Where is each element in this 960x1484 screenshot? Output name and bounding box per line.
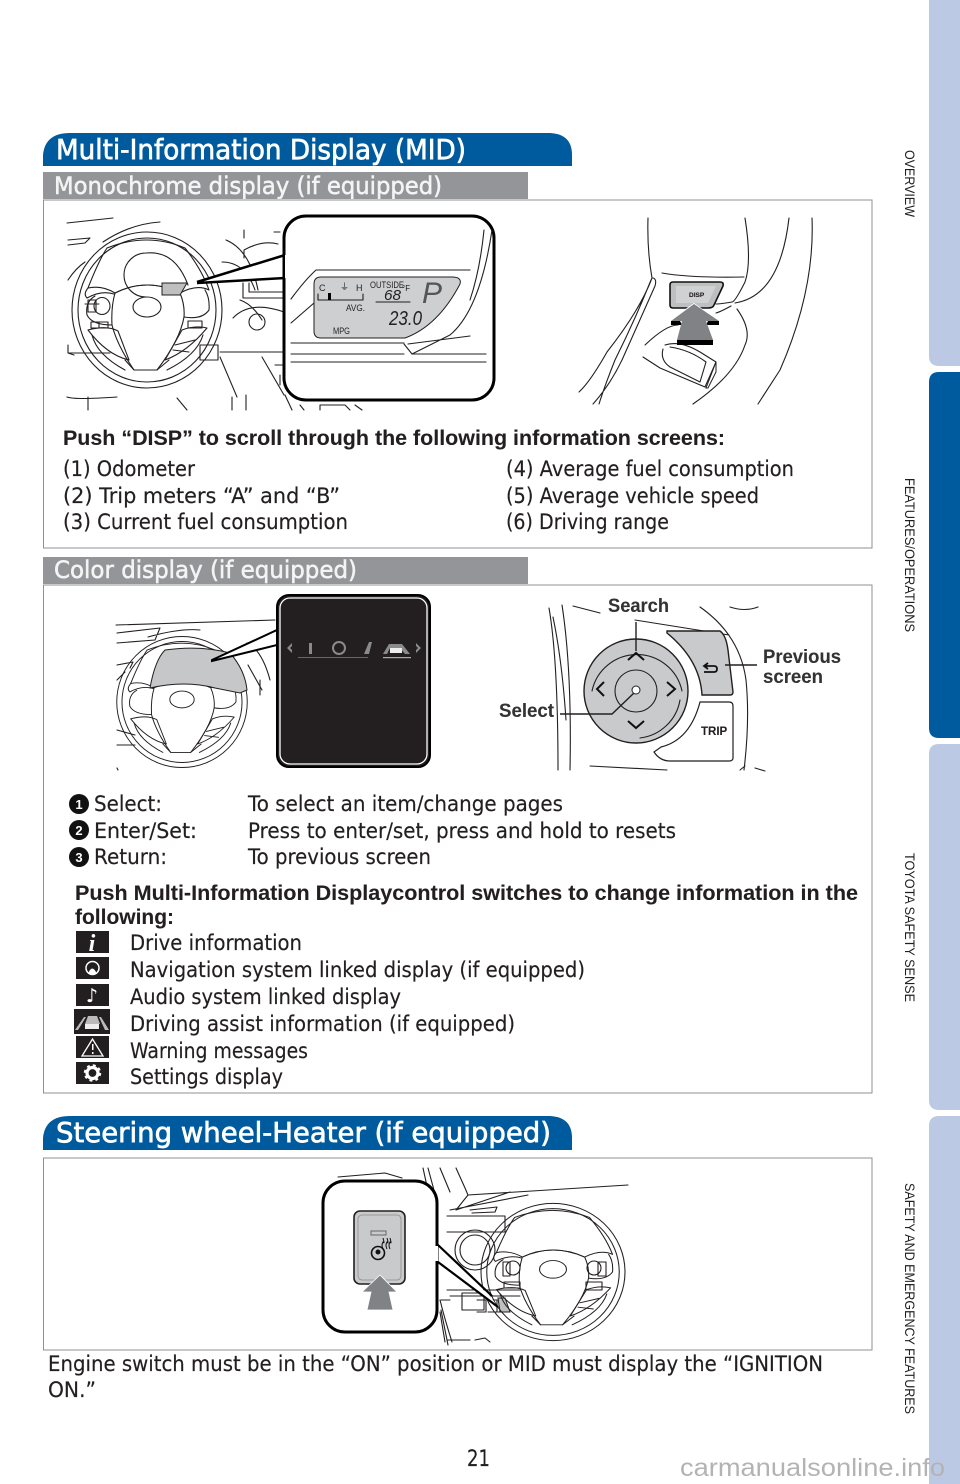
- text: screens list left: (2) Trip meters “A” and “B”: [63, 484, 340, 508]
- callout: monochrome instrument display: 68: [384, 287, 402, 304]
- information list: Navigation system linked display (if equipped): [130, 958, 585, 982]
- label: Search: Search: [608, 596, 669, 617]
- controls list: Return:: [94, 845, 167, 869]
- information list: [130, 931, 585, 1089]
- sidebar labels: OVERVIEW: [902, 150, 917, 217]
- icon: number 1: [69, 794, 89, 814]
- callout: monochrome instrument display: MPG: [333, 326, 350, 336]
- text: screens list right: (5) Average vehicle speed: [506, 484, 759, 508]
- sidebar tab: features and operations (active): [929, 372, 960, 738]
- text: engine switch note: ON.”: [48, 1378, 96, 1402]
- callout: monochrome instrument display: C: [319, 283, 326, 293]
- sidebar tab: overview: [929, 0, 960, 366]
- icon: settings: [76, 1062, 109, 1084]
- information list: Audio system linked display: [130, 985, 401, 1009]
- icon: heater switch: [354, 1211, 405, 1284]
- controls list: [69, 792, 676, 869]
- icon: steering wheel: [72, 232, 222, 388]
- icon: steering wheel: [481, 1203, 625, 1341]
- controls list: Press to enter/set, press and hold to resets: [248, 819, 676, 843]
- sidebar labels: TOYOTA SAFETY SENSE: [902, 853, 917, 1002]
- illustration: dashboard with highlighted cluster: [116, 620, 275, 770]
- text: switches instructions: [75, 882, 858, 929]
- illustration: dashboard with steering wheel: [338, 1168, 628, 1345]
- icon: number 2: 2: [75, 823, 83, 838]
- illustration: dashboard with steering wheel: [67, 218, 362, 410]
- text: screens list left: [63, 457, 348, 534]
- callout: monochrome instrument display: P: [422, 277, 442, 310]
- watermark: carmanualsonline.info: [680, 1454, 945, 1482]
- illustration: steering switch cluster: [549, 605, 765, 771]
- sidebar tab: safety and emergency features: [929, 1116, 960, 1484]
- callout: monochrome instrument display: OUTSIDE: [370, 280, 404, 290]
- panel: monochrome display: [44, 200, 872, 548]
- information list: Drive information: [130, 931, 302, 955]
- text: engine switch note: [48, 1352, 823, 1402]
- text: screens list right: (4) Average fuel consumption: [506, 457, 794, 481]
- callout: monochrome instrument display: H: [356, 283, 362, 293]
- panel: steering wheel heater: [44, 1158, 872, 1350]
- information list: Warning messages: [130, 1039, 308, 1063]
- text: screens list right: [506, 457, 794, 534]
- callout: monochrome instrument display: [197, 216, 494, 400]
- icon: directional controller: [584, 639, 688, 743]
- icon: number 3: 3: [75, 850, 83, 865]
- panel: color display: [44, 585, 872, 1093]
- controls list: Enter/Set:: [94, 819, 197, 843]
- icon: steering wheel: [117, 636, 247, 768]
- subheading: Monochrome display: Monochrome display (if equipped): [54, 172, 442, 200]
- icon: drive information: [76, 931, 109, 957]
- label: Select: Select: [499, 701, 555, 722]
- callout: monochrome instrument display: AVG.: [346, 303, 365, 313]
- text: screens list right: (6) Driving range: [506, 510, 669, 534]
- label: Previous screen: [763, 647, 841, 688]
- sidebar labels: [902, 150, 917, 1414]
- callout: monochrome instrument display: 23.0: [388, 308, 422, 330]
- information list: Settings display: [130, 1065, 283, 1089]
- icon: TRIP button: TRIP: [701, 726, 728, 738]
- icon: warning: [76, 1036, 109, 1058]
- icon: audio: ♪: [86, 985, 98, 1007]
- sidebar labels: FEATURES/OPERATIONS: [902, 478, 917, 632]
- heading: Multi-Information Display: Multi-Information Display (MID): [56, 133, 466, 166]
- icon: navigation: [76, 957, 109, 979]
- controls list: Select:: [94, 792, 162, 816]
- icon: driving assist: [74, 1009, 110, 1034]
- label: Previous screen: screen: [763, 667, 823, 688]
- sidebar labels: SAFETY AND EMERGENCY FEATURES: [902, 1183, 917, 1414]
- text: switches instructions: following:: [75, 906, 174, 929]
- page number: 21: [467, 1447, 490, 1472]
- subheading: Color display: Color display (if equipped): [54, 556, 357, 584]
- information list: Driving assist information (if equipped): [130, 1012, 515, 1036]
- illustration: DISP switch: [579, 218, 812, 404]
- icon: number 3: [69, 847, 89, 867]
- arrow: press DISP: [667, 303, 721, 345]
- icon: audio: [76, 984, 109, 1007]
- text: screens list left: (3) Current fuel consumption: [63, 510, 348, 534]
- label: Previous screen: Previous: [763, 647, 841, 668]
- callout: color display screen: [212, 595, 430, 767]
- callout: heater switch: [323, 1181, 498, 1342]
- controls list: To previous screen: [247, 845, 431, 869]
- text: engine switch note: Engine switch must be in the “ON” position or MID must display the “IGNITION: [48, 1352, 823, 1376]
- controls list: To select an item/change pages: [247, 792, 563, 816]
- icon: DISP button: [670, 282, 723, 308]
- text: screens list left: (1) Odometer: [63, 457, 195, 481]
- icon: drive information: i: [89, 931, 96, 957]
- icon: DISP button: DISP: [689, 292, 705, 299]
- subheading: Color display: [43, 556, 528, 584]
- icon: number 1: 1: [75, 797, 83, 812]
- icon: TRIP button: [654, 702, 733, 761]
- callout: monochrome instrument display: °F: [402, 284, 410, 293]
- arrow: press switch: [362, 1275, 397, 1310]
- text: push DISP heading: Push “DISP” to scroll through the following information screens:: [63, 427, 725, 450]
- heading: Steering wheel-Heater: Steering wheel-Heater (if equipped): [56, 1116, 551, 1149]
- text: switches instructions: Push Multi-Information Displaycontrol switches to change information in the: [75, 882, 858, 905]
- icon: return button: [667, 631, 733, 695]
- icon: number 2: [69, 820, 89, 840]
- sidebar tab: toyota safety sense: [929, 744, 960, 1110]
- callout: monochrome instrument display: ⏚: [340, 282, 349, 292]
